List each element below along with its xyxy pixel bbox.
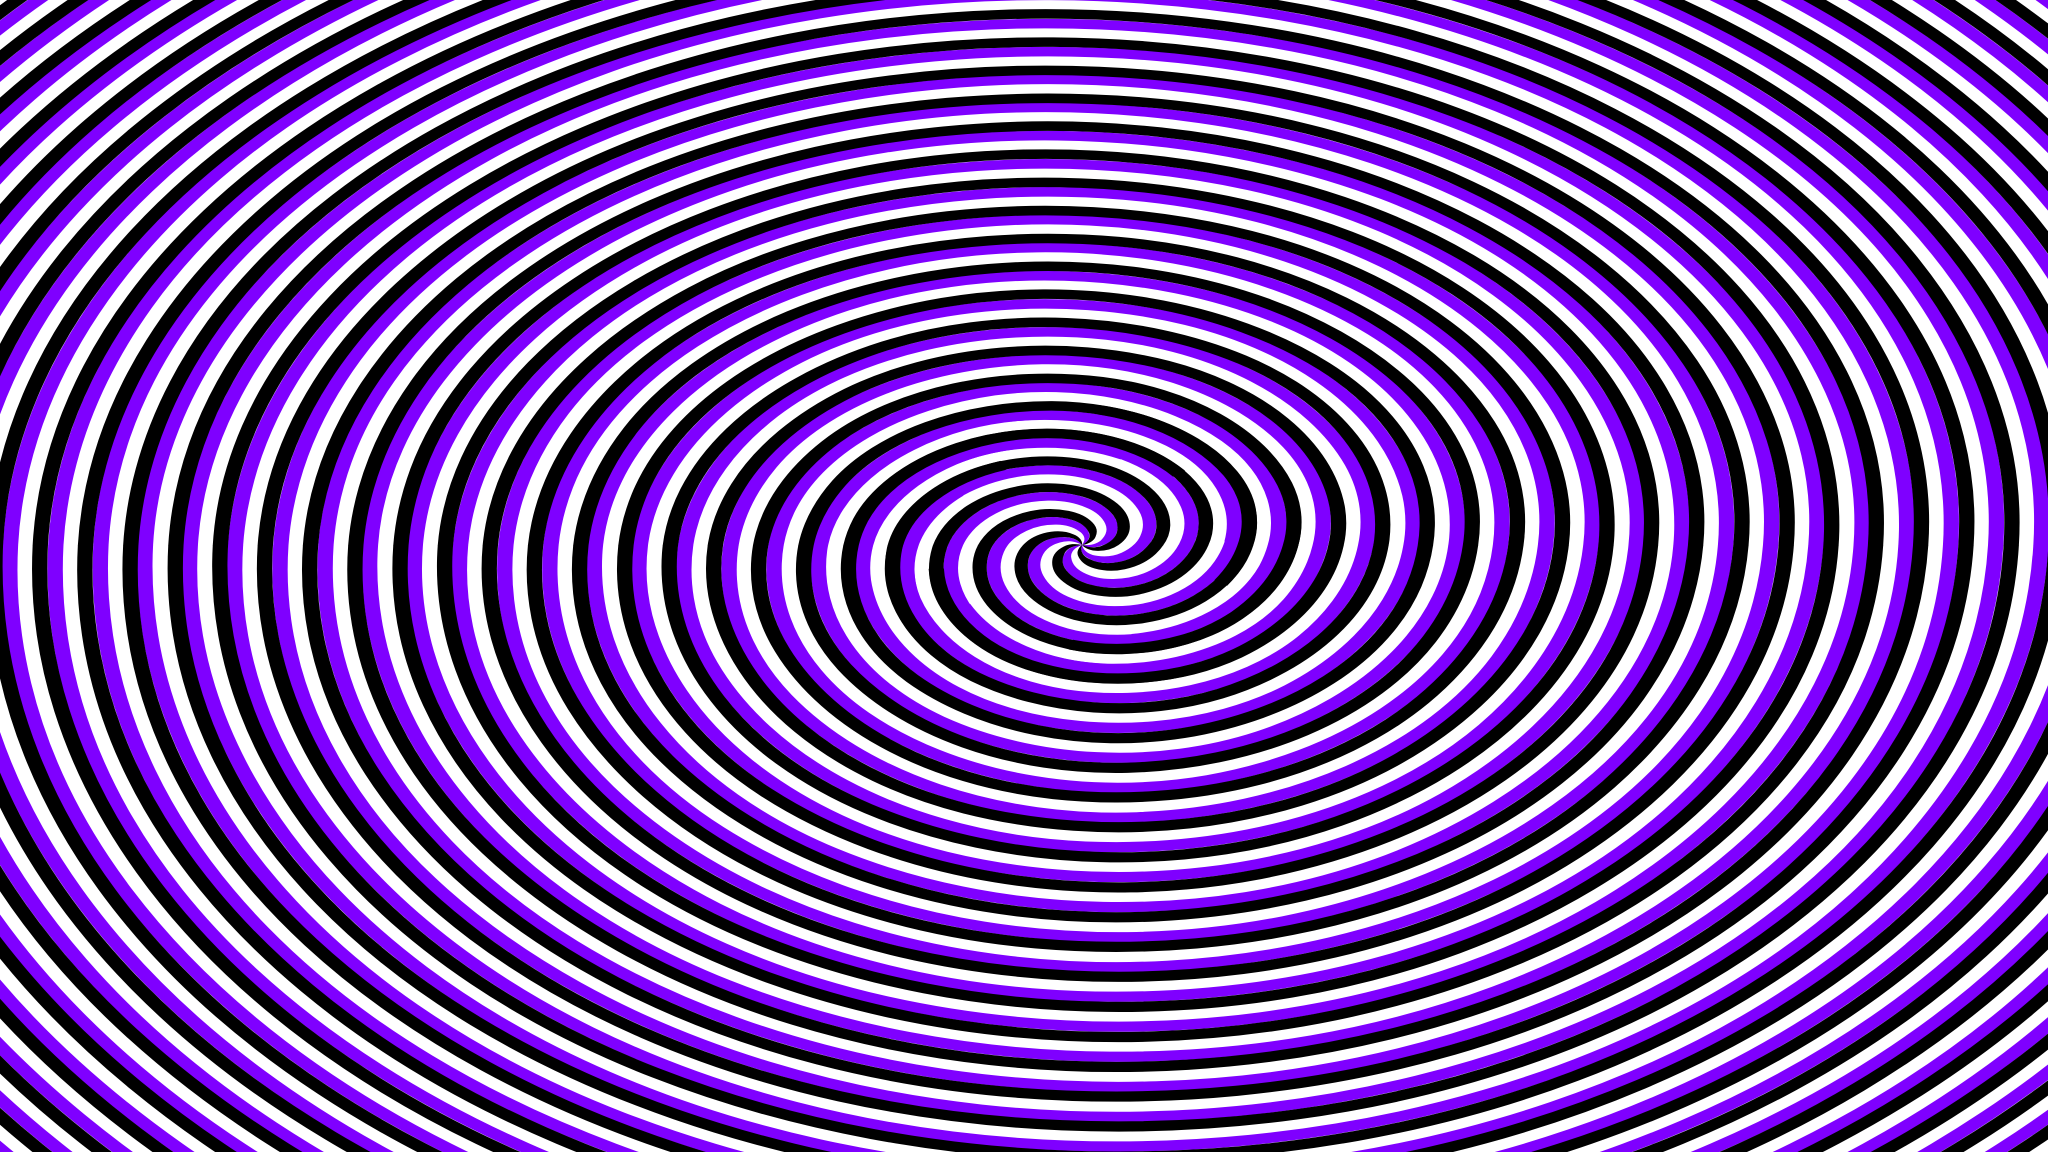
spiral: upper half bbox=[0, 0, 2048, 546]
spiral: lower half bbox=[0, 545, 2048, 1152]
